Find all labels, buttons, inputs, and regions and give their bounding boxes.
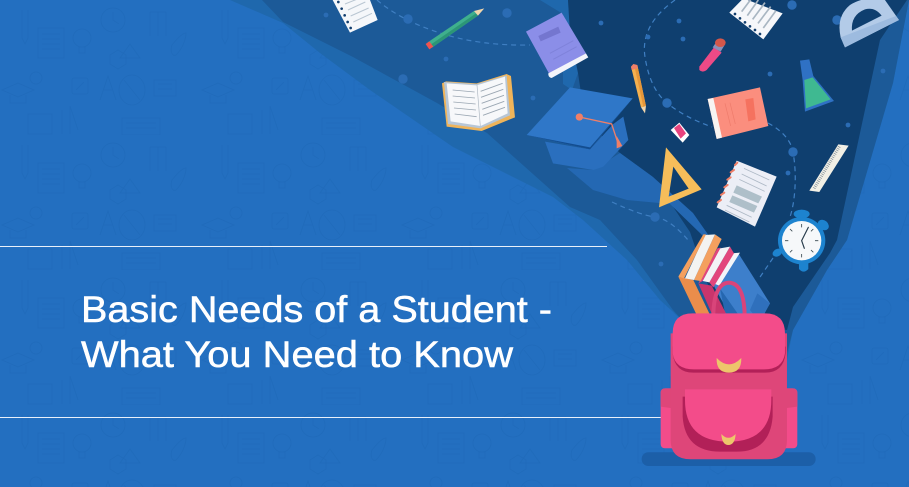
icon: protractor bbox=[839, 0, 899, 47]
icon: purple book bbox=[526, 13, 588, 78]
flap shadow bbox=[673, 347, 786, 373]
icon: backpack bbox=[642, 283, 816, 466]
icon: eraser bbox=[671, 123, 689, 143]
icon: open book bbox=[442, 74, 515, 131]
handle bbox=[713, 283, 745, 315]
swoosh: mid layer bbox=[262, 0, 909, 353]
icon: alarm clock bbox=[771, 210, 831, 272]
title: Basic Needs of a Student - bbox=[81, 289, 552, 330]
pocket buckle bbox=[721, 434, 736, 445]
icon: ruler bbox=[809, 144, 849, 192]
icon: test tube bbox=[699, 38, 726, 72]
icon: green pencil bbox=[426, 8, 484, 49]
title bbox=[81, 289, 552, 375]
swoosh: light strip bbox=[540, 0, 578, 90]
dots and dashed paths bbox=[324, 0, 885, 280]
pocket bbox=[685, 389, 771, 442]
rules bbox=[0, 246, 661, 418]
title: What You Need to Know bbox=[81, 334, 513, 375]
icon: notepad top right bbox=[729, 0, 783, 39]
icon: stacked books bbox=[678, 234, 770, 322]
swoosh: fold under cap bbox=[567, 153, 716, 250]
buckle bbox=[717, 358, 741, 373]
side pockets bbox=[661, 388, 677, 448]
icon: spiral notebook bbox=[717, 161, 777, 227]
icon: triangle ruler bbox=[659, 147, 702, 207]
body bbox=[671, 333, 787, 459]
flap bbox=[673, 313, 785, 369]
icon: flask bbox=[800, 59, 834, 112]
swoosh: outer band bbox=[230, 0, 909, 360]
icon: graduation cap bbox=[527, 87, 633, 170]
blue book bbox=[713, 253, 770, 322]
icon: orange pencil bbox=[631, 64, 646, 113]
icon: salmon book bbox=[708, 87, 768, 139]
pocket shadow bbox=[683, 397, 773, 452]
icon: notepad top left bbox=[333, 0, 378, 33]
orange book bbox=[678, 277, 712, 318]
shadow bbox=[642, 452, 816, 466]
swoosh: dark centre bbox=[568, 0, 907, 330]
pink book bbox=[698, 283, 726, 313]
